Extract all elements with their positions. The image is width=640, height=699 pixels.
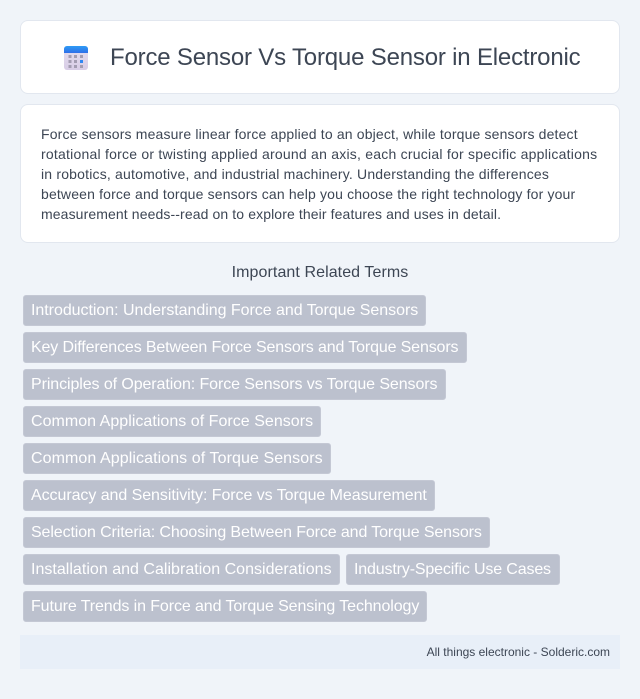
intro paragraph: rotational force or twisting applied around an axis, each crucial for specific applications	[41, 146, 597, 162]
tag: principles: Principles of Operation: Force Sensors vs Torque Sensors	[31, 376, 437, 393]
intro paragraph: between force and torque sensors can help you choose the right technology for your	[41, 186, 575, 202]
intro paragraph: Force sensors measure linear force applied to an object, while torque sensors detect	[41, 126, 578, 142]
title: Force Sensor Vs Torque Sensor in Electronic	[110, 44, 580, 71]
tag: key differences: Key Differences Between Force Sensors and Torque Sensors	[31, 339, 458, 356]
tag: future trends: Future Trends in Force and Torque Sensing Technology	[31, 598, 419, 615]
tag: installation	[23, 554, 340, 585]
intro paragraph: measurement needs--read on to explore their features and uses in detail.	[41, 206, 501, 222]
tag: industry	[346, 554, 560, 585]
icon: calendar	[64, 46, 88, 70]
tag: industry: Industry-Specific Use Cases	[354, 561, 551, 578]
intro paragraph	[41, 126, 597, 222]
tag: accuracy: Accuracy and Sensitivity: Force vs Torque Measurement	[31, 487, 427, 504]
intro text card	[20, 104, 620, 243]
tag: force applications	[23, 406, 321, 437]
tag: selection	[23, 517, 490, 548]
tag: key differences	[23, 332, 467, 363]
tag: introduction	[23, 295, 426, 326]
tag: force applications: Common Applications of Force Sensors	[31, 413, 313, 430]
footer	[20, 635, 620, 669]
intro paragraph: in robotics, automotive, and industrial machinery. Understanding the differences	[41, 166, 549, 182]
header card	[20, 20, 620, 94]
tag: selection: Selection Criteria: Choosing Between Force and Torque Sensors	[31, 524, 482, 541]
term tags	[23, 295, 560, 622]
tag: accuracy	[23, 480, 435, 511]
section heading: Important Related Terms	[232, 264, 408, 281]
tag: principles	[23, 369, 446, 400]
tag: installation: Installation and Calibration Considerations	[31, 561, 332, 578]
tag: introduction: Introduction: Understanding Force and Torque Sensors	[31, 302, 418, 319]
footer: All things electronic - Solderic.com	[427, 645, 610, 659]
tag: future trends	[23, 591, 427, 622]
tag: torque applications: Common Applications of Torque Sensors	[31, 450, 323, 467]
tag: torque applications	[23, 443, 331, 474]
